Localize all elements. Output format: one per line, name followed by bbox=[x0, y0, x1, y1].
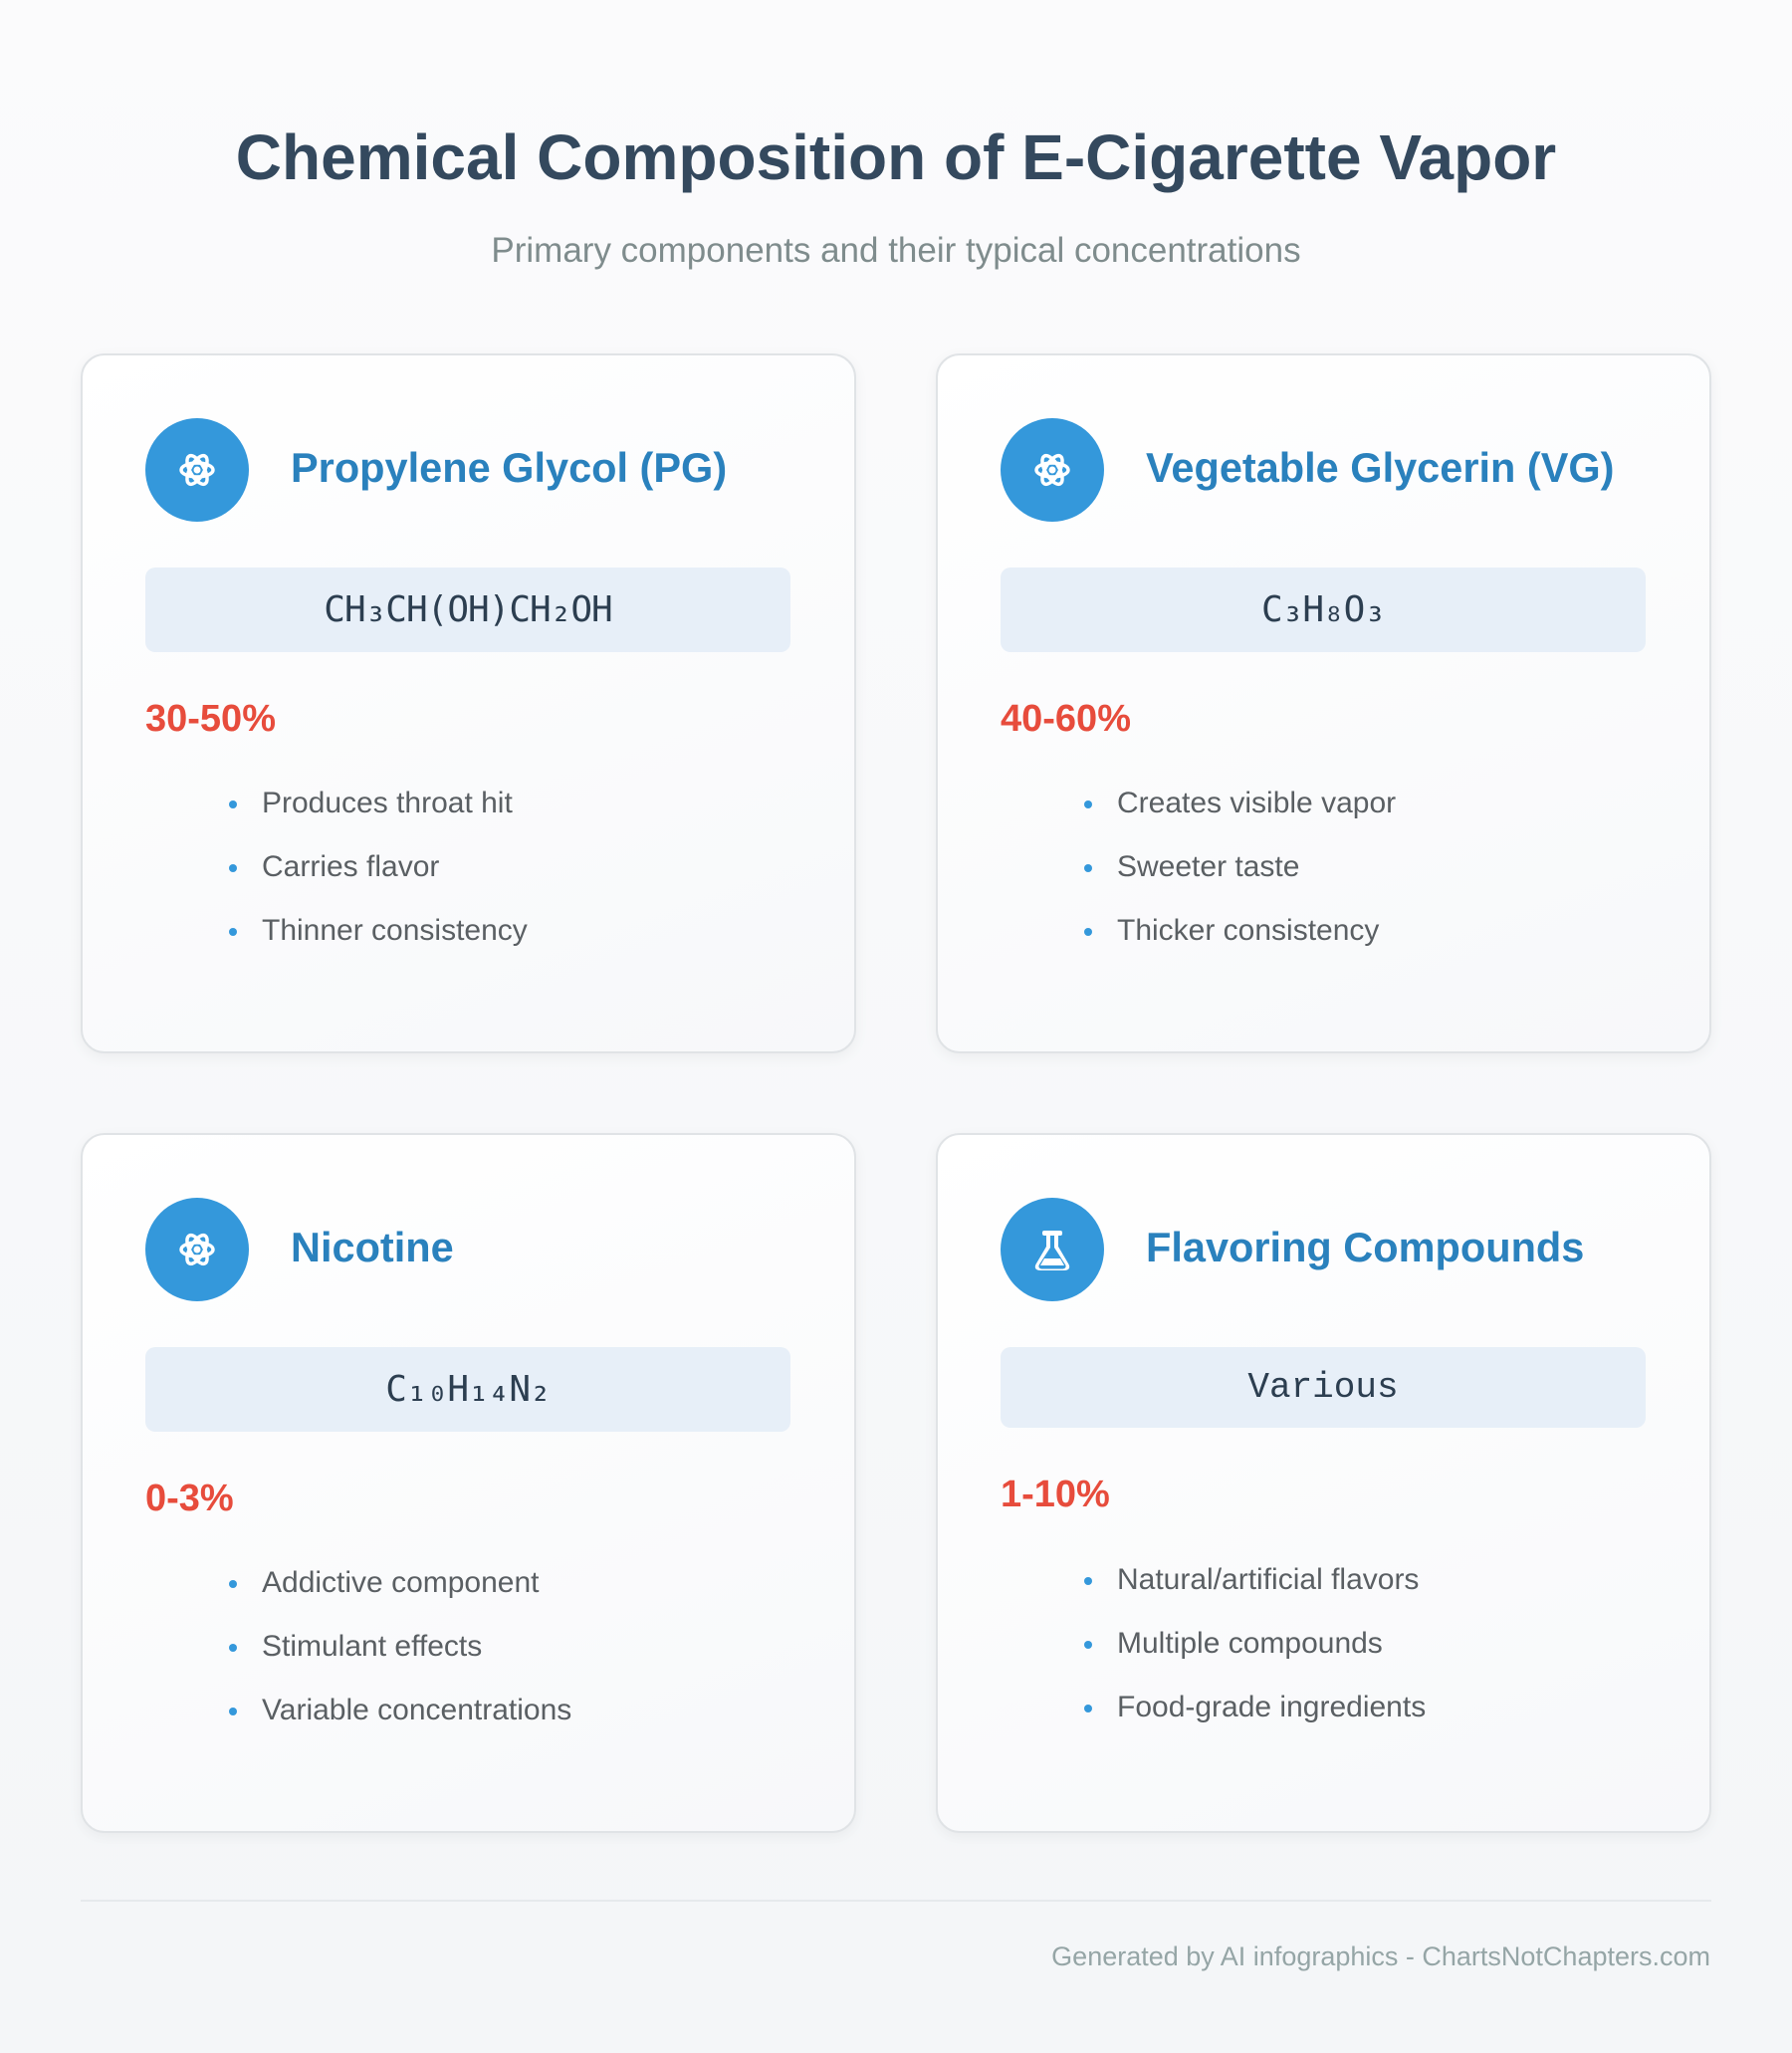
bullet list: Variable concentrations bbox=[262, 1694, 571, 1726]
percentage: 40-60% bbox=[1001, 698, 1131, 740]
heading: Propylene Glycol (PG) bbox=[291, 444, 727, 491]
panel: nicotine bbox=[81, 1133, 856, 1833]
formula: Various bbox=[1247, 1367, 1399, 1408]
formula: CH₃CH(OH)CH₂OH bbox=[324, 589, 612, 630]
bullet list: Carries flavor bbox=[262, 850, 439, 883]
footer: Generated by AI infographics - ChartsNotChapters.com bbox=[1051, 1941, 1710, 1971]
title: Chemical Composition of E-Cigarette Vapor bbox=[236, 121, 1556, 193]
panel: propylene glycol bbox=[81, 353, 856, 1053]
percentage: 30-50% bbox=[145, 698, 276, 740]
heading: Nicotine bbox=[291, 1224, 454, 1270]
bullet list: Addictive component bbox=[262, 1566, 540, 1599]
bullet list bbox=[1084, 787, 1396, 947]
bullet list: Natural/artificial flavors bbox=[1117, 1563, 1419, 1596]
subtitle: Primary components and their typical concentrations bbox=[491, 231, 1301, 270]
bullet list: Produces throat hit bbox=[262, 787, 513, 819]
bullet list: Sweeter taste bbox=[1117, 850, 1299, 883]
bullet list: Thicker consistency bbox=[1117, 914, 1379, 947]
formula: C₃H₈O₃ bbox=[1261, 589, 1385, 630]
formula bbox=[145, 568, 790, 652]
formula: C₁₀H₁₄N₂ bbox=[385, 1369, 551, 1410]
bullet list: Thinner consistency bbox=[262, 914, 528, 947]
bullet list bbox=[229, 787, 528, 947]
percentage: 1-10% bbox=[1001, 1474, 1110, 1515]
bullet list: Food-grade ingredients bbox=[1117, 1691, 1426, 1723]
icon: atom bbox=[145, 1198, 249, 1301]
formula bbox=[145, 1347, 790, 1432]
icon: atom bbox=[145, 418, 249, 522]
bullet list: Creates visible vapor bbox=[1117, 787, 1396, 819]
heading: Vegetable Glycerin (VG) bbox=[1146, 444, 1615, 491]
icon: flask bbox=[1001, 1198, 1104, 1301]
heading: Flavoring Compounds bbox=[1146, 1224, 1584, 1270]
percentage: 0-3% bbox=[145, 1478, 234, 1519]
formula bbox=[1001, 568, 1646, 652]
formula bbox=[1001, 1347, 1646, 1428]
bullet list bbox=[1084, 1563, 1426, 1723]
icon: atom bbox=[1001, 418, 1104, 522]
panel: vegetable glycerin bbox=[936, 353, 1711, 1053]
bullet list: Multiple compounds bbox=[1117, 1627, 1383, 1660]
bullet list: Stimulant effects bbox=[262, 1630, 482, 1663]
panel: flavoring compounds bbox=[936, 1133, 1711, 1833]
bullet list bbox=[229, 1566, 571, 1726]
